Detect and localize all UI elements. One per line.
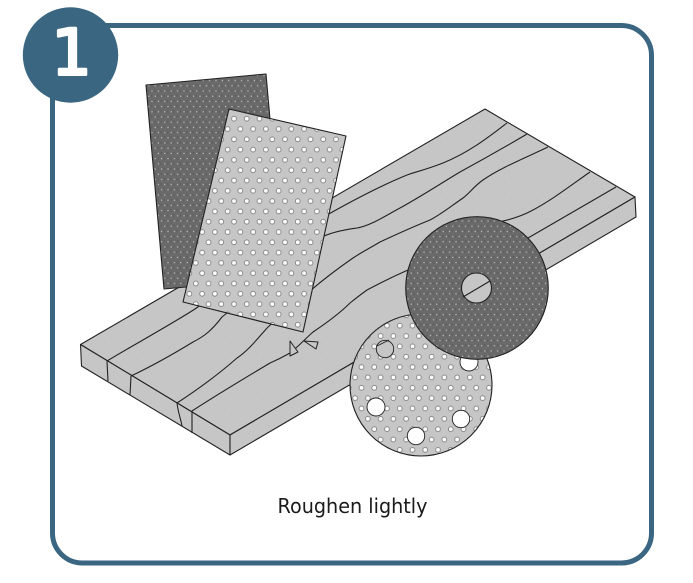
wooden board [80,109,636,455]
light perforated sanding sheet [183,109,346,332]
disc holes [367,340,478,445]
disc face [406,217,548,359]
step number: 1 [51,16,92,90]
dark sanding sheet [146,74,284,289]
left triangle [290,341,298,356]
wood grain lines [107,123,616,433]
board front side [80,344,230,455]
right triangle [304,341,318,349]
rounded card frame [52,26,652,563]
disc face [350,314,492,456]
centre hole [462,273,492,303]
grain line through hole [463,281,490,297]
sanding dust arrows [290,341,318,356]
step number badge [23,7,118,103]
dark sanding disc [406,217,548,359]
light sanding disc [350,314,492,456]
board right side [230,197,636,455]
caption: Roughen lightly [278,494,428,518]
badge circle [23,7,118,103]
board top face [80,109,635,435]
